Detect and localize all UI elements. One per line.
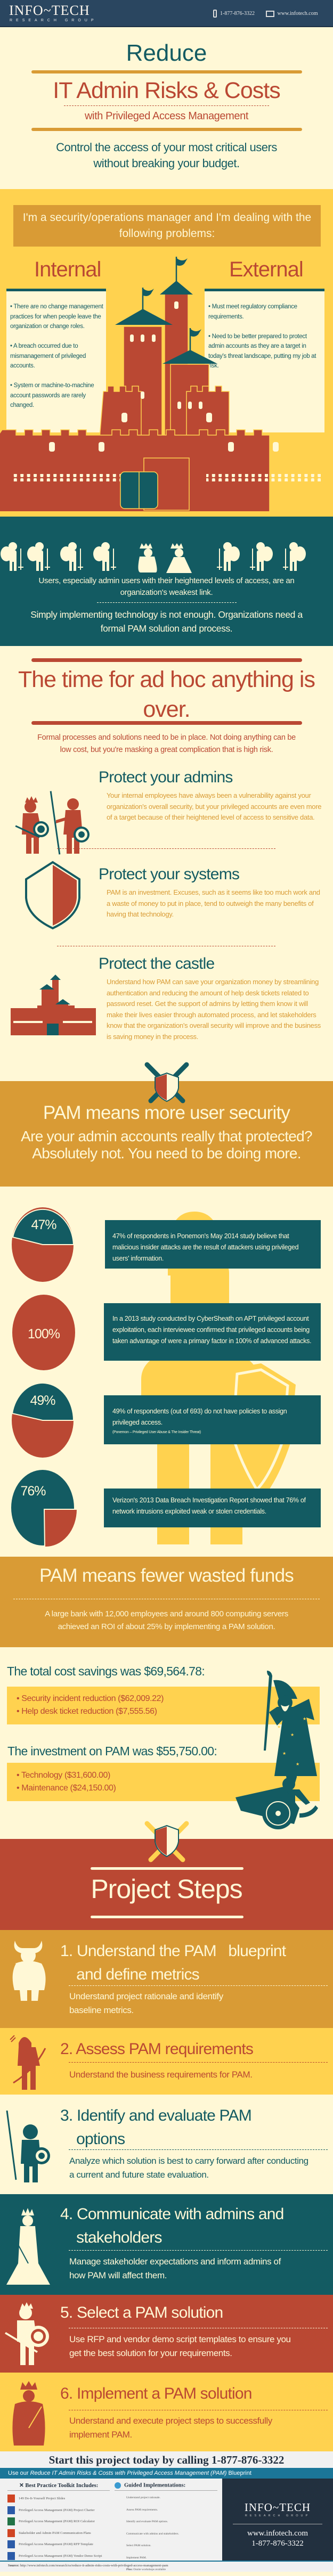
text: Use RFP and vendor demo script templates to ensure you [69, 2334, 291, 2344]
icon: viking [13, 1941, 46, 2001]
toolkit list: Privileged Access Management (PAM) Project Charter [19, 2508, 95, 2512]
title: Reduce: Reduce [126, 40, 207, 66]
heading: Project Steps: Project Steps [91, 1874, 242, 1904]
text: weakest link: Users, especially admin users with their heightened levels of access, are an [39, 576, 294, 585]
text: baseline metrics. [69, 2005, 134, 2015]
box: 76% stat [104, 1489, 321, 1527]
subheading: Absolutely not. You need to be doing more. [32, 1145, 301, 1162]
heading: ad hoc: over. [143, 697, 190, 722]
text [69, 2256, 281, 2280]
heading: total cost savings: The total cost savings was $69,564.78: [7, 1664, 205, 1678]
icons: row of people [1, 542, 306, 573]
block: protect your systems [99, 865, 320, 918]
text: Understand and execute project steps to successfully [69, 2416, 272, 2426]
text: bank ROI [45, 1609, 288, 1631]
icon: two warriors [15, 791, 90, 854]
section: problems (yellow) [0, 189, 333, 517]
block: protect your admins [99, 768, 321, 821]
icon: king [12, 2381, 45, 2446]
heading: external: External [229, 258, 303, 281]
text: bank ROI: achieved an ROI of about 25% by implementing a PAM solution. [58, 1622, 275, 1631]
subheading: Are your admin accounts really that protected? [21, 1128, 312, 1144]
chart: pie 49% [12, 1384, 74, 1458]
icon: small castle [11, 975, 96, 1035]
text: Understand project rationale and identify [69, 1991, 223, 2001]
toolkit list: Privileged Access Management (PAM) RFP Template [19, 2542, 93, 2546]
background: yellow knight figure [141, 1212, 296, 1544]
icon: wizard: ★ [290, 1732, 294, 1737]
footer [0, 2451, 333, 2572]
intro box: manager problems [13, 205, 321, 247]
subheading [21, 1128, 312, 1162]
guided implementations: Communicate with admins and stakeholders. [126, 2532, 179, 2535]
contact info [213, 10, 318, 18]
icon: wizard: ★ [277, 1724, 281, 1729]
source: Source: http://www.infotech.com/research/ss/reduce-it-admin-risks-costs-with-privileged-access-management-pam [8, 2564, 168, 2567]
step 2 [0, 2028, 333, 2095]
guided implementations: Guided Implementations: [124, 2482, 185, 2488]
text: Manage stakeholder expectations and inform admins of [69, 2256, 281, 2267]
heading: ad hoc: The time for ad hoc anything is [18, 667, 315, 692]
text [69, 2416, 273, 2440]
box: 49% stat [104, 1395, 321, 1444]
chart: pie 47% [12, 1207, 74, 1282]
contact panel: RESEARCH GROUP [245, 2514, 310, 2517]
icon: shield [25, 861, 80, 930]
box: 49% stat: 49% of respondents (out of 693) do not have policies to assign privileged access. [112, 1408, 287, 1426]
heading: investment: The investment on PAM was $55,750.00: [7, 1744, 217, 1758]
block: protect your admins: Protect your admins [99, 768, 233, 786]
block: protect your systems: PAM is an investment. Excuses, such as it seems like too much work and a waste of money to put in place, tend to outweigh the many benefits of having that technology. [107, 888, 320, 918]
toolkit list: 149 Do-It-Yourself Project Slides [19, 2497, 65, 2500]
header bar: RESEARCH GROUP [10, 19, 98, 22]
box: 47% stat [105, 1220, 321, 1269]
text: technology not enough: Simply implementing technology is not enough. Organizations need a [30, 609, 303, 620]
step 1 [0, 1930, 333, 2028]
contact panel: www.infotech.com [247, 2529, 308, 2538]
icon: knight with sword [5, 2302, 49, 2365]
text: weakest link [39, 576, 294, 597]
icon: archer [10, 2035, 46, 2090]
box: savings list: • Help desk ticket reduction ($7,555.56) [17, 1707, 157, 1716]
icon: crossed swords yellow [145, 1821, 189, 1862]
step 5 [0, 2295, 333, 2373]
box: 47% stat: 47% of respondents in Ponemon's May 2014 study believe that malicious insider attacks are the result of attackers using privileged users' information. [112, 1232, 298, 1262]
step 6 [0, 2373, 333, 2451]
tagline [56, 141, 277, 170]
heading: and define metrics [76, 1966, 199, 1983]
door [120, 472, 158, 509]
box: 100% stat: In a 2013 study conducted by CyberSheath on APT privileged account exploitation, each interviewee confirmed that privileged accounts being taken advantage of were a primary factor in 100% of advanced attacks. [112, 1315, 311, 1345]
guided implementations: Understand project rationale. [126, 2496, 160, 2499]
intro box: manager problems: I'm a security/operations manager and I'm dealing with the following problems: [23, 211, 311, 240]
text: a current and future state evaluation. [69, 2170, 209, 2180]
icon: cannon [235, 1776, 318, 1829]
title: IT Admin Risks & Costs: IT Admin Risks & Costs [53, 78, 280, 103]
text [69, 1991, 224, 2015]
text: formal processes: low cost, but you're masking a great complication that is high risk. [60, 746, 273, 754]
chart: pie 76% [11, 1470, 77, 1547]
tagline: without breaking your budget. [93, 157, 240, 170]
text: formal processes [37, 733, 296, 754]
panel: internal: • System or machine-to-machine account passwords are rarely changed. [10, 382, 94, 408]
text: implement PAM. [69, 2430, 132, 2440]
toolkit list: Privileged Access Management (PAM) Vendor Demo Script [19, 2554, 102, 2557]
heading: 6. Implement a PAM solution [60, 2385, 252, 2402]
call to action: Start this project today by calling 1-877-876-3322 [49, 2454, 284, 2466]
chart: pie 100%: 100% [28, 1327, 60, 1342]
heading: PAM means fewer wasted funds [39, 1565, 294, 1586]
heading: 5. Select a PAM solution [60, 2304, 223, 2321]
subtitle: with Privileged Access Management [85, 110, 248, 122]
icon: wizard: ★ [303, 1716, 306, 1721]
block: protect the castle: Understand how PAM can save your organization money by streamlining authentication and reducing the amount of help desk tickets related to password reset. Get the support of admins by letting them know it will make their lives easier through automated process, and let stakeholders know that the organization's overall security will improve and the business is saving money in the process. [107, 978, 321, 1041]
heading: 3. Identify and evaluate PAM [60, 2107, 251, 2124]
heading: options [76, 2130, 125, 2148]
toolkit list: Privileged Access Management (PAM) ROI Calculator [19, 2520, 95, 2523]
text: Analyze which solution is best to carry forward after conducting [69, 2156, 308, 2166]
text [69, 2334, 291, 2358]
heading: internal: Internal [34, 258, 101, 281]
toolkit list: ✕ Best Practice Toolkit Includes: [19, 2483, 98, 2489]
panel: external [205, 289, 324, 432]
contact panel [222, 2479, 333, 2561]
chart: pie 47%: 47% [31, 1217, 56, 1232]
panel: external: • Must meet regulatory compliance requirements. [208, 304, 297, 320]
box: investment list: • Maintenance ($24,150.00) [17, 1784, 116, 1793]
text: Understand the business requirements for PAM. [69, 2070, 253, 2080]
logo: INFO~TECH [9, 3, 90, 18]
heading: 1. Understand the PAM blueprint [60, 1942, 286, 1960]
guided implementations: Select PAM solution. [126, 2544, 151, 2547]
text: how PAM will affect them. [69, 2270, 167, 2280]
contact panel: 1-877-876-3322 [251, 2539, 304, 2548]
box: 76% stat: Verizon's 2013 Data Breach Investigation Report showed that 76% of network intrusions exploited weak or stolen credentials. [112, 1496, 306, 1515]
step 3 [0, 2095, 333, 2194]
blueprint bar: Use our Reduce IT Admin Risks & Costs with Privileged Access Management (PAM) Blueprint [8, 2470, 251, 2476]
panel: internal [6, 289, 106, 432]
icon: wizard: ★ [296, 1762, 299, 1767]
heading [60, 2205, 284, 2246]
text: weakest link: organization's weakest link. [120, 588, 213, 597]
contact info: 1-877-876-3322 www.infotech.com [220, 11, 318, 17]
heading: ad hoc [18, 667, 315, 722]
heading [60, 1942, 286, 1983]
heading: PAM means more user security [43, 1102, 290, 1123]
text: bank ROI: A large bank with 12,000 employees and around 800 computing servers [45, 1609, 288, 1618]
section: users weakest link (teal) [0, 517, 333, 646]
text: get the best solution for your requirements. [69, 2348, 232, 2358]
icon: crossed swords with shield [145, 1062, 189, 1103]
section: PAM means more user security [0, 1081, 333, 1187]
block: protect the castle: Protect the castle [99, 955, 214, 972]
guided implementations: Identify and evaluate PAM options. [126, 2520, 168, 2523]
step 4 [0, 2194, 333, 2295]
heading: 4. Communicate with admins and [60, 2205, 284, 2223]
text: technology not enough: formal PAM solution and process. [101, 623, 232, 634]
contact panel: INFO~TECH [245, 2501, 311, 2514]
illustration: big castle [0, 257, 321, 511]
guided implementations [115, 2481, 217, 2575]
heading: stakeholders [76, 2229, 162, 2246]
icon: wizard: ★ [282, 1751, 286, 1756]
box: 100% stat [104, 1303, 321, 1361]
block: protect your admins: Your internal employees have always been a vulnerability against your organization's overall security, but your privileged accounts are even more of a target because of their heightened level of access to sensitive data. [107, 791, 321, 821]
panel: external: • Need to be better prepared to protect admin accounts as they are a target in today's threat landscape, putting my job at risk. [208, 333, 316, 369]
header bar [0, 0, 333, 27]
section: fewer wasted funds [0, 1557, 333, 1647]
heading [60, 2107, 251, 2148]
guided implementations: Assess PAM requirements. [126, 2508, 158, 2512]
chart: pie 76%: 76% [20, 1484, 46, 1499]
box: savings list: • Security incident reduction ($62,009.22) [17, 1694, 164, 1703]
icon: spearman [6, 2111, 50, 2182]
section: ad hoc over [31, 658, 302, 662]
text: technology not enough [30, 609, 303, 634]
block: protect your systems: Protect your systems [99, 865, 239, 883]
box: investment list [7, 1763, 320, 1801]
text: formal processes: Formal processes and solutions need to be in place. Not doing anything can be [37, 733, 296, 742]
panel: internal: • There are no change management practices for when people leave the organization or change roles. [10, 304, 103, 330]
box: investment list: • Technology ($31,600.00) [17, 1771, 110, 1780]
tagline: Control the access of your most critical users [56, 141, 277, 154]
blueprint bar [0, 2468, 333, 2479]
box: savings list [7, 1687, 320, 1724]
icon: wizard [264, 1671, 317, 1776]
guided implementations: Plus: Onsite workshops available [126, 2568, 166, 2571]
chart: pie 49%: 49% [30, 1393, 55, 1408]
text [69, 2156, 308, 2180]
toolkit list: Stakeholder and Admin PAM Communication Plans [19, 2531, 91, 2535]
icon: queen [6, 2208, 50, 2285]
section: project steps header [0, 1839, 333, 1930]
guided implementations: Implement PAM. [126, 2556, 147, 2559]
heading: 2. Assess PAM requirements [60, 2040, 253, 2058]
toolkit list [7, 2483, 110, 2560]
panel: internal: • A breach occurred due to mismanagement of privileged accounts. [10, 343, 86, 369]
box: 49% stat: (Ponemon – Privileged User Abuse & The Insider Threat) [112, 1430, 201, 1434]
chart: pie 100% [12, 1295, 75, 1370]
